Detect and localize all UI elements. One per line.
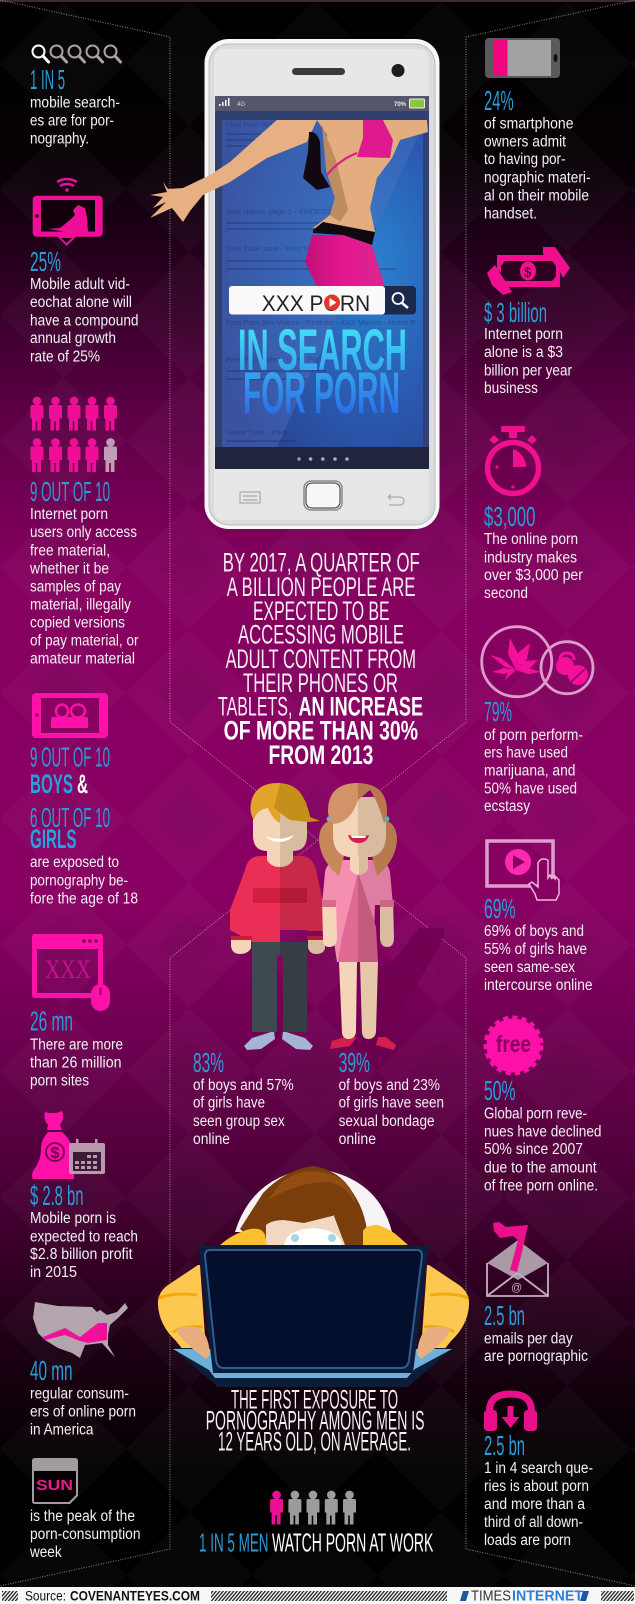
text: videochat: Mobile adult vid- (30, 276, 130, 293)
text: smartphone owners: owners admit (484, 133, 567, 150)
text: first exposure (206, 1384, 424, 1457)
stat: 3 billion: $ 3 billion (484, 297, 547, 328)
phone screen: 70% (394, 102, 407, 108)
text: per second: over $3,000 per (484, 567, 583, 584)
text: emails per day: emails per day (484, 1331, 573, 1348)
panel: left column (29, 46, 140, 1561)
text: free material: amateur material (30, 650, 135, 667)
callout: 1 in 5 men: WATCH PORN AT WORK (272, 1527, 434, 1557)
callout: 1 in 5 men (199, 1527, 434, 1557)
text: group sex: of boys and 57% (193, 1077, 294, 1094)
search bar: XXX PORN (262, 291, 370, 316)
icon: money bag and calendar (32, 1111, 105, 1179)
stat: 6 out of 10 girls: GIRLS (30, 824, 76, 854)
text: free material: material, illegally (30, 597, 131, 614)
text: same-sex: 55% of girls have (484, 941, 587, 958)
stat: 6 out of 10 girls (30, 802, 110, 854)
stat: 40 mn: 40 mn (30, 1355, 72, 1386)
phone screen: Free Porn Sex Videos - Redtube - XXX Movies - Home P (226, 318, 416, 327)
text: free material: free material, (30, 542, 110, 560)
text: performers (484, 727, 583, 815)
text: search queries: loads are porn (484, 1532, 571, 1549)
text: search queries: ries is about porn (484, 1478, 589, 1495)
headline: 2017 forecast: ACCESSING MOBILE (238, 620, 404, 650)
text: emails per day (484, 1331, 588, 1365)
text: mobile searches: nography. (30, 130, 89, 148)
text: 3 billion business: alone is a $3 (484, 344, 563, 361)
stat: 79%: 79% (484, 696, 512, 727)
text: mobile searches: es are for por- (30, 112, 114, 130)
text: mobile searches: mobile search- (30, 94, 120, 111)
icon: envelope: @ (511, 1282, 522, 1294)
text: search queries: and more than a (484, 1496, 585, 1513)
panel: left column: 1 IN 5 (30, 64, 65, 95)
text: bondage: of girls have seen (339, 1095, 444, 1112)
text: 3 billion business: business (484, 380, 538, 397)
text: age of 18: are exposed to (30, 854, 119, 871)
icon: leaf and pills circles (482, 627, 593, 697)
stat: 2.8 bn: $ 2.8 bn (30, 1180, 84, 1211)
text: group sex: of girls have (193, 1095, 265, 1112)
text: regular consumers: ers of online porn (30, 1404, 136, 1421)
text: age of 18: fore the age of 18 (30, 890, 138, 907)
text: search queries (484, 1460, 593, 1549)
headline: 2017 forecast: A BILLION PEOPLE ARE (227, 572, 416, 602)
text: regular consumers: in America (30, 1421, 94, 1438)
icon: free badge: free (496, 1031, 531, 1057)
headline: 2017 forecast: BY 2017, A QUARTER OF (223, 548, 420, 578)
text: porn sites: porn sites (30, 1072, 89, 1089)
text: group sex: online (193, 1131, 230, 1148)
text: performers: ecstasy (484, 798, 530, 815)
text: mobile porn profit (30, 1210, 138, 1281)
phone illustration (150, 39, 440, 529)
icon: tablet with couple (32, 693, 108, 738)
text: revenues declined: due to the amount (484, 1160, 597, 1176)
stat: 25%: 25% (30, 246, 61, 277)
text: videochat (30, 276, 138, 366)
search bar (229, 286, 416, 316)
headline: 2017 forecast: TABLETS, (218, 692, 292, 722)
icon: stopwatch (488, 426, 538, 494)
stat: 50%: 50% (484, 1075, 516, 1106)
text: mobile porn profit: $2.8 billion profit (30, 1246, 133, 1263)
icon: banknote with arrows: $ (524, 264, 532, 280)
headline: 2017 forecast (218, 548, 423, 770)
text: revenues declined: Global porn reve- (484, 1105, 587, 1122)
text: same-sex: intercourse online (484, 977, 592, 994)
title (238, 318, 407, 426)
title: FOR PORN (243, 361, 400, 426)
headline: 2017 forecast: THEIR PHONES OR (243, 668, 398, 698)
text: performers: ers have used (484, 745, 568, 762)
text: revenues declined: 50% since 2007 (484, 1141, 583, 1158)
phone screen: Free Porn Videos - XXX Porn (226, 355, 324, 364)
logo: Times Internet: TIMES (471, 1588, 511, 1604)
figure shadow (374, 928, 445, 1024)
text: free material: Internet porn (30, 506, 108, 523)
text: mobile porn profit: expected to reach (30, 1228, 138, 1245)
text: regular consumers (30, 1386, 136, 1438)
text: bondage: of boys and 23% (339, 1077, 440, 1094)
stat: 9 out of 10 boys: & (77, 769, 88, 799)
icon: touchscreen play (487, 841, 559, 900)
panel: left column: 6 OUT OF 10 (30, 802, 110, 833)
source credit: COVENANTEYES.COM (70, 1588, 200, 1604)
icon: SUN calendar: SUN (36, 1478, 73, 1494)
headline: 2017 forecast: EXPECTED TO BE (253, 596, 390, 626)
icon: envelope (487, 1222, 548, 1296)
headline: 2017 forecast: OF MORE THAN 30% (224, 716, 418, 746)
phone buttons (240, 481, 404, 510)
text: smartphone owners: of smartphone (484, 115, 574, 132)
text: smartphone owners: nographic materi- (484, 170, 590, 186)
icon: tablet with wifi (33, 179, 103, 246)
text: videochat: have a compound (30, 312, 138, 330)
stat: 3,000: $3,000 (484, 501, 536, 532)
text: 3 billion business (484, 326, 572, 397)
text: performers: 50% have used (484, 780, 577, 797)
text: smartphone owners: handset. (484, 205, 537, 222)
text: age of 18: pornography be- (30, 872, 128, 889)
text: bondage (339, 1077, 444, 1148)
text: smartphone owners: to having por- (484, 151, 565, 168)
text: revenues declined (484, 1105, 602, 1194)
panel: left column: 9 OUT OF 10 (30, 742, 110, 772)
headline: 2017 forecast: FROM 2013 (268, 740, 373, 770)
text: search queries: third of all down- (484, 1514, 583, 1531)
title: IN SEARCH (238, 318, 407, 383)
logo: Times Internet: INTERNET (512, 1588, 583, 1604)
stat: 26 mn: 26 mn (30, 1006, 73, 1036)
icon: browser window with mouse: XXX (45, 955, 91, 984)
panel: left column: 9 OUT OF 10 (30, 476, 110, 507)
text: same-sex: seen same-sex (484, 959, 575, 976)
text: search queries: 1 in 4 search que- (484, 1460, 593, 1477)
text: revenues declined: nues have declined (484, 1123, 602, 1140)
text: revenues declined: of free porn online. (484, 1177, 598, 1194)
illustration: person behind laptop (158, 1166, 469, 1387)
text: mobile porn profit: Mobile porn is (30, 1210, 116, 1227)
icon: people 9 of 10 (30, 397, 117, 472)
text: smartphone owners (484, 115, 590, 222)
text: bondage: sexual bondage (339, 1113, 435, 1130)
icon: five men (270, 1491, 356, 1524)
text: per second (484, 531, 583, 602)
illustration: woman leaning out of the screen (150, 120, 428, 287)
boy (230, 783, 325, 1050)
text: mobile searches (30, 94, 120, 148)
text: performers: marijuana, and (484, 762, 576, 780)
text: group sex: seen group sex (193, 1113, 285, 1130)
icon: money bag and calendar: $ (50, 1145, 60, 1162)
stat: 9 out of 10 boys: BOYS (30, 769, 73, 799)
text: mobile porn profit: in 2015 (30, 1264, 77, 1281)
text: peak of week: week (29, 1544, 62, 1561)
text: peak of week: is the peak of the (30, 1508, 135, 1525)
phone screen: porn videos, page 1 - XVIDEOS.C (226, 207, 340, 216)
text: free material: whether it be (29, 560, 109, 577)
stat: 2.5 bn search: 2.5 bn (484, 1430, 525, 1461)
text: same-sex (484, 923, 592, 994)
stat: 2.5 bn emails: 2.5 bn (484, 1300, 525, 1331)
icon: browser window with mouse (32, 934, 110, 1011)
text: emails per day: are pornographic (484, 1348, 588, 1365)
text: videochat: eochat alone will (30, 294, 132, 311)
text: age of 18 (30, 854, 138, 907)
icon: SUN calendar (32, 1458, 78, 1504)
panel: right column (482, 38, 602, 1549)
text: free material: users only access (30, 524, 137, 541)
text: peak of week: porn-consumption (30, 1526, 140, 1543)
stat: 39%: 39% (339, 1047, 370, 1078)
text: videochat: annual growth (30, 330, 116, 347)
stat: 9 out of 10 boys (30, 742, 110, 799)
stat: 24%: 24% (484, 85, 514, 116)
icon: US map (33, 1302, 128, 1358)
text: free material: copied versions (30, 614, 125, 632)
text: per second: The online porn (484, 531, 578, 548)
text: porn sites: than 26 million (30, 1054, 122, 1072)
text: regular consumers: regular consum- (30, 1386, 129, 1403)
headline: 2017 forecast: AN INCREASE (298, 692, 423, 722)
phone screen: Home Tube - Porn (226, 428, 287, 437)
source credit: Source: (25, 1588, 66, 1604)
text: porn sites: There are more (30, 1036, 123, 1054)
icon: magnifiers (32, 46, 120, 62)
text: same-sex: 69% of boys and (484, 923, 584, 940)
text: porn sites (30, 1036, 123, 1089)
text: bondage: online (339, 1131, 376, 1148)
phone screen: 4G (237, 102, 245, 108)
footer (0, 1587, 635, 1604)
text: first exposure: PORNOGRAPHY AMONG MEN IS (206, 1406, 424, 1436)
text: first exposure: THE FIRST EXPOSURE TO (231, 1384, 398, 1414)
phone screen: Dino Tube .com - Porn Tu (226, 244, 311, 253)
text: free material (29, 506, 138, 667)
text: videochat: rate of 25% (30, 348, 100, 366)
icon: banknote with arrows (487, 247, 570, 295)
illustration: boy and girl (230, 783, 445, 1050)
text: smartphone owners: al on their mobile (484, 187, 589, 204)
text: free material: of pay material, or (30, 632, 138, 649)
text: first exposure: 12 YEARS OLD, ON AVERAGE. (218, 1427, 411, 1457)
phone screen: Free Porn Videos (226, 120, 284, 129)
headline: 2017 forecast: ADULT CONTENT FROM (226, 644, 416, 674)
icon: headphones download (484, 1394, 537, 1431)
phone screen (215, 96, 429, 469)
girl (319, 783, 397, 1050)
text: free material: samples of pay (30, 579, 121, 596)
stat: 83%: 83% (193, 1047, 224, 1078)
icon: phone with pink strip (485, 38, 560, 78)
text: performers: of porn perform- (484, 727, 583, 744)
text: group sex (193, 1077, 294, 1148)
text: peak of week (29, 1508, 140, 1561)
stat: 69%: 69% (484, 893, 516, 924)
text: 3 billion business: billion per year (484, 362, 572, 379)
text: per second: industry makes (484, 549, 577, 566)
callout: 1 in 5 men: 1 IN 5 MEN (199, 1527, 268, 1557)
icon: free badge (486, 1018, 540, 1072)
text: 3 billion business: Internet porn (484, 326, 563, 343)
text: per second: second (484, 585, 528, 602)
logo: Times Internet (460, 1588, 589, 1604)
